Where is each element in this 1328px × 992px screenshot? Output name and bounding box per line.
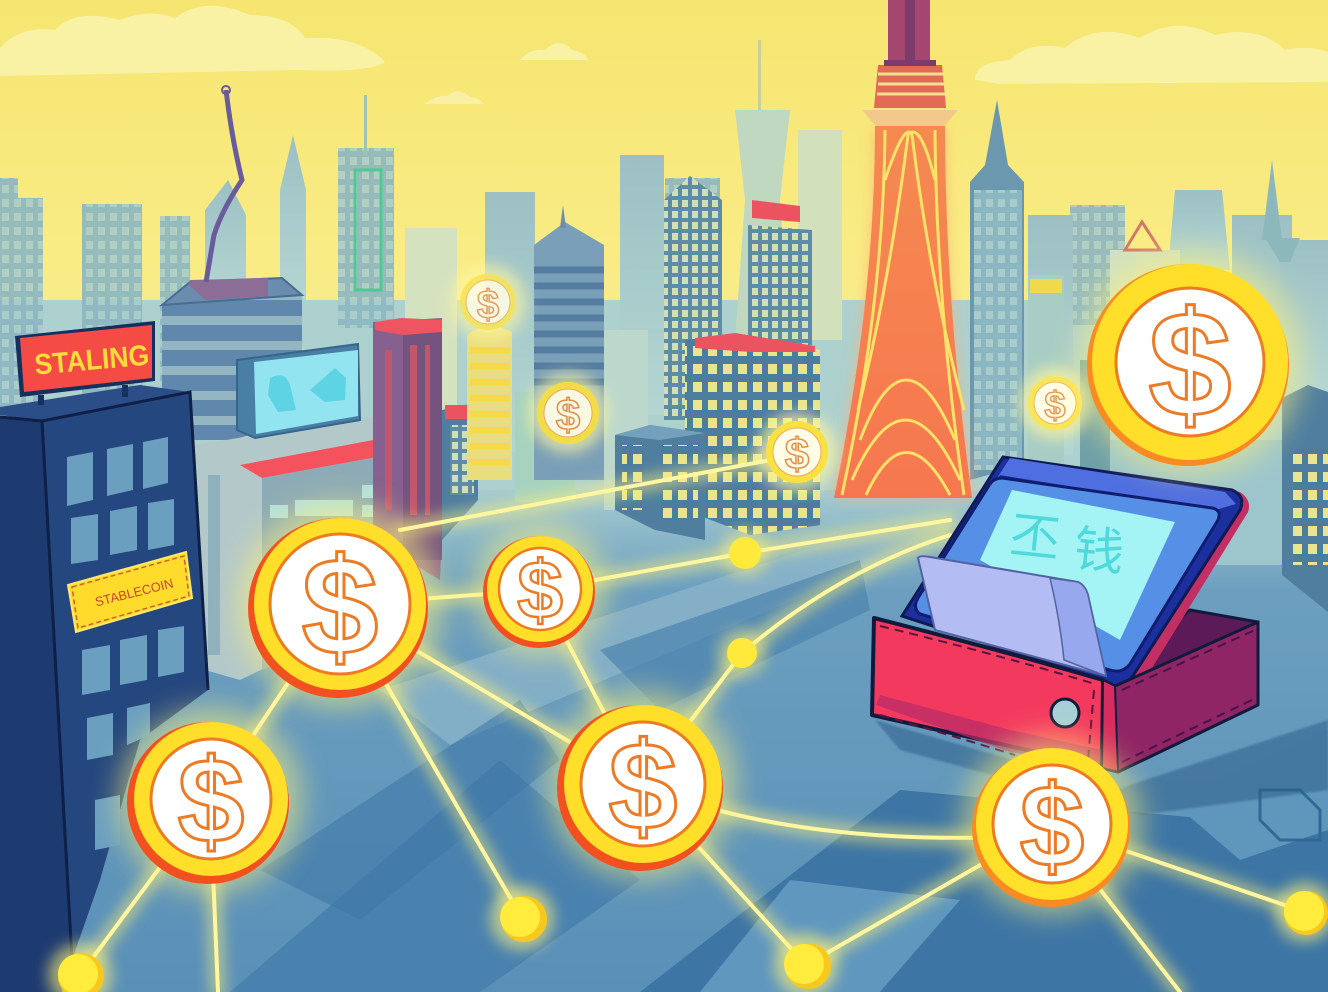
network nodes: [48, 529, 1328, 992]
coin: distant 2: [528, 373, 608, 453]
building: green low block: [515, 392, 575, 502]
antenna: [206, 86, 242, 282]
coin: centre left large: $: [302, 530, 378, 684]
tablet screen: 钱: [1071, 521, 1127, 582]
coin: centre small: [474, 524, 606, 656]
coin: centre small: $: [517, 545, 563, 636]
building: small navy: [442, 402, 478, 540]
wallet shadow: [875, 720, 1328, 815]
wallet with tablet: [872, 457, 1328, 815]
wallet front: [872, 618, 1103, 767]
wallet side: [1102, 622, 1258, 772]
coin: near tablet: $: [1044, 385, 1066, 427]
large coins: [118, 250, 1302, 915]
left foreground building: [0, 321, 208, 992]
coin: distant 1: $: [477, 283, 499, 327]
label: STABLECOIN: STABLECOIN: [93, 576, 175, 609]
coin: on line: $: [785, 430, 809, 479]
tablet screen: 丕: [1007, 507, 1063, 568]
billboard: [237, 344, 360, 438]
building windows: [67, 437, 184, 850]
network glowing lines: [80, 455, 1305, 992]
building: windowed block front: [685, 333, 820, 535]
coin: top right: [1078, 250, 1302, 474]
ground with road map: [0, 440, 1328, 992]
coin: on line: [757, 412, 837, 492]
tablet screen: [980, 490, 1175, 640]
building: maroon tower: [373, 318, 442, 580]
coin: distant 2: $: [556, 391, 580, 440]
coin: centre lower: $: [609, 718, 677, 856]
wallet button: [1051, 699, 1079, 727]
sign: STALING: [15, 321, 155, 405]
coin: top right: $: [1148, 280, 1232, 448]
coin: lower right: $: [1020, 761, 1084, 891]
tower landmark: [834, 0, 972, 498]
building: tall grey tower: [970, 100, 1024, 480]
coin: lower left: $: [178, 734, 244, 868]
coin: centre lower: [548, 691, 736, 879]
sign: STALING: STALING: [33, 340, 151, 382]
label: STABLECOIN: [68, 552, 192, 632]
wallet back flap: [1115, 610, 1258, 770]
coin: lower right: [962, 735, 1142, 915]
tablet: [902, 457, 1249, 690]
building: low front cube: [615, 425, 705, 540]
card in wallet: [918, 556, 1106, 676]
building: grid tower: [664, 176, 722, 420]
sky background: [0, 0, 1328, 520]
building: striped tower: [162, 278, 302, 440]
faint floating coins: [450, 264, 1091, 492]
building: right mid: [1028, 275, 1110, 490]
coin: distant 1: [450, 264, 526, 340]
building: yellow striped cylinder: [467, 327, 512, 480]
coin: centre left large: [238, 503, 442, 707]
clouds: [0, 6, 1328, 104]
building: blue striped tower: [534, 205, 604, 480]
coin: lower left: [118, 708, 302, 892]
building: grey podium: [195, 415, 405, 680]
coin: near tablet: [1019, 367, 1091, 439]
building: red roof tower: [748, 200, 812, 345]
building: right edge tower: [1282, 385, 1328, 612]
far skyline: [0, 40, 1328, 540]
mid-distance buildings: [162, 86, 1328, 680]
